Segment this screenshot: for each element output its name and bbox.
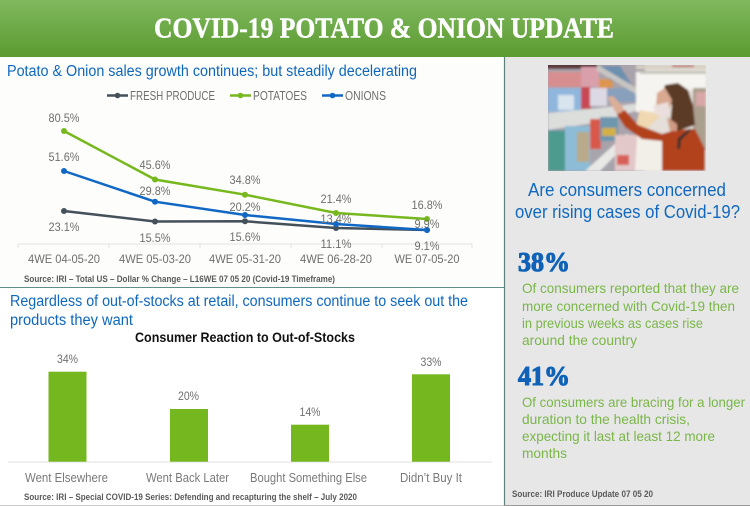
neck and strap [667,117,677,131]
x axis labels: 4WE 06-28-20 [300,252,372,266]
x axis labels: 4WE 05-03-20 [119,252,191,266]
chart legend: FRESH PRODUCE [130,89,215,103]
data labels: 80.5% [48,111,80,125]
source note: Source: IRI – Total US – Dollar % Change – L16WE 07 05 20 (Covid-19 Timeframe) [24,274,335,284]
bar: bought something else [250,405,367,485]
data labels: 34.8% [230,173,261,187]
x axis labels [28,252,460,266]
left shelving base [545,62,645,174]
bar: went elsewhere [25,352,108,485]
bar: didn't buy it [400,355,462,485]
data labels: 15.5% [140,231,171,245]
upper shelf lip [596,65,637,94]
lower left products [548,129,566,132]
bar: went elsewhere: Went Elsewhere [25,471,108,485]
stat: 41% [518,361,745,461]
question heading: Are consumers concerned [528,179,726,200]
data labels: 20.2% [230,200,261,214]
series: fresh produce [61,208,430,233]
chart title: Consumer Reaction to Out-of-Stocks [135,329,355,345]
data labels: 13.4% [320,212,352,226]
hand [607,96,624,113]
bar: didn't buy it: 33% [420,355,442,369]
heading: out-of-stocks [10,293,468,329]
x axis labels: 4WE 05-31-20 [209,252,281,266]
hair [662,83,695,131]
bar: bought something else: Bought Something Else [250,471,367,485]
stat: 38% [518,247,739,348]
stat: 38%: Of consumers reported that they are [522,280,739,296]
stat: 38%: in previous weeks as cases rise [522,315,703,331]
header banner [0,0,750,57]
data labels: 11.1% [320,237,352,251]
series: potatoes [61,128,430,222]
stat: 41%: duration to the health crisis, [522,411,690,427]
face [656,88,672,108]
bar: went elsewhere: 34% [57,352,78,366]
stat: 41%: 41% [518,361,570,391]
data labels: 16.8% [412,198,443,212]
data labels: 15.6% [230,230,261,244]
bar: went back later: Went Back Later [146,471,229,485]
bar: went back later [146,389,229,485]
bar: didn't buy it: Didn’t Buy It [400,471,462,485]
main shelf [548,102,637,131]
stat: 41%: expecting it last at least 12 more [522,428,715,444]
bar: went back later: 20% [178,389,199,403]
stat: 38%: more concerned with Covid-19 then [522,298,735,314]
source note: Source: IRI Produce Update 07 05 20 [512,489,653,499]
panel: out-of-stocks bar chart [0,293,504,506]
panel: consumer concern sidebar [504,57,750,506]
question heading [515,179,740,222]
bar chart [8,352,492,485]
stat: 38%: 38% [518,247,570,277]
stat: 41%: months [522,445,567,461]
x axis labels: 4WE 04-05-20 [28,252,100,266]
source note: Source: IRI – Special COVID-19 Series: Defending and recapturing the shelf – July 2020 [24,492,357,502]
x axis labels: WE 07-05-20 [394,252,460,266]
chart legend: POTATOES [253,89,307,103]
stat: 38%: around the country [522,332,637,348]
data labels: 51.6% [48,150,80,164]
chart legend [107,89,386,103]
data labels: 23.1% [48,220,80,234]
bar: bought something else: 14% [300,405,321,419]
sweater [662,129,705,171]
line chart [18,111,472,266]
heading: out-of-stocks: Regardless of out-of-stocks at retail, consumers continue to seek out the [10,293,468,310]
right shelving [693,88,706,150]
data labels [48,111,443,253]
photo: shopper in mask at store shelf [545,62,710,174]
title: COVID-19 POTATO & ONION UPDATE [154,12,614,44]
data labels: 9.1% [414,239,440,253]
panel: sales growth line chart [7,63,472,284]
heading: sales growth: Potato & Onion sales growth continues; but steadily decelerating [7,63,417,80]
data labels: 45.6% [140,158,171,172]
aisle floor and bright background [635,136,665,171]
data labels: 29.8% [140,184,171,198]
series: onions [61,168,430,233]
mask [653,102,670,118]
chart legend: ONIONS [345,89,386,103]
heading: out-of-stocks: products they want [10,312,134,329]
data labels: 21.4% [320,192,352,206]
data labels: 9.9% [414,217,440,231]
